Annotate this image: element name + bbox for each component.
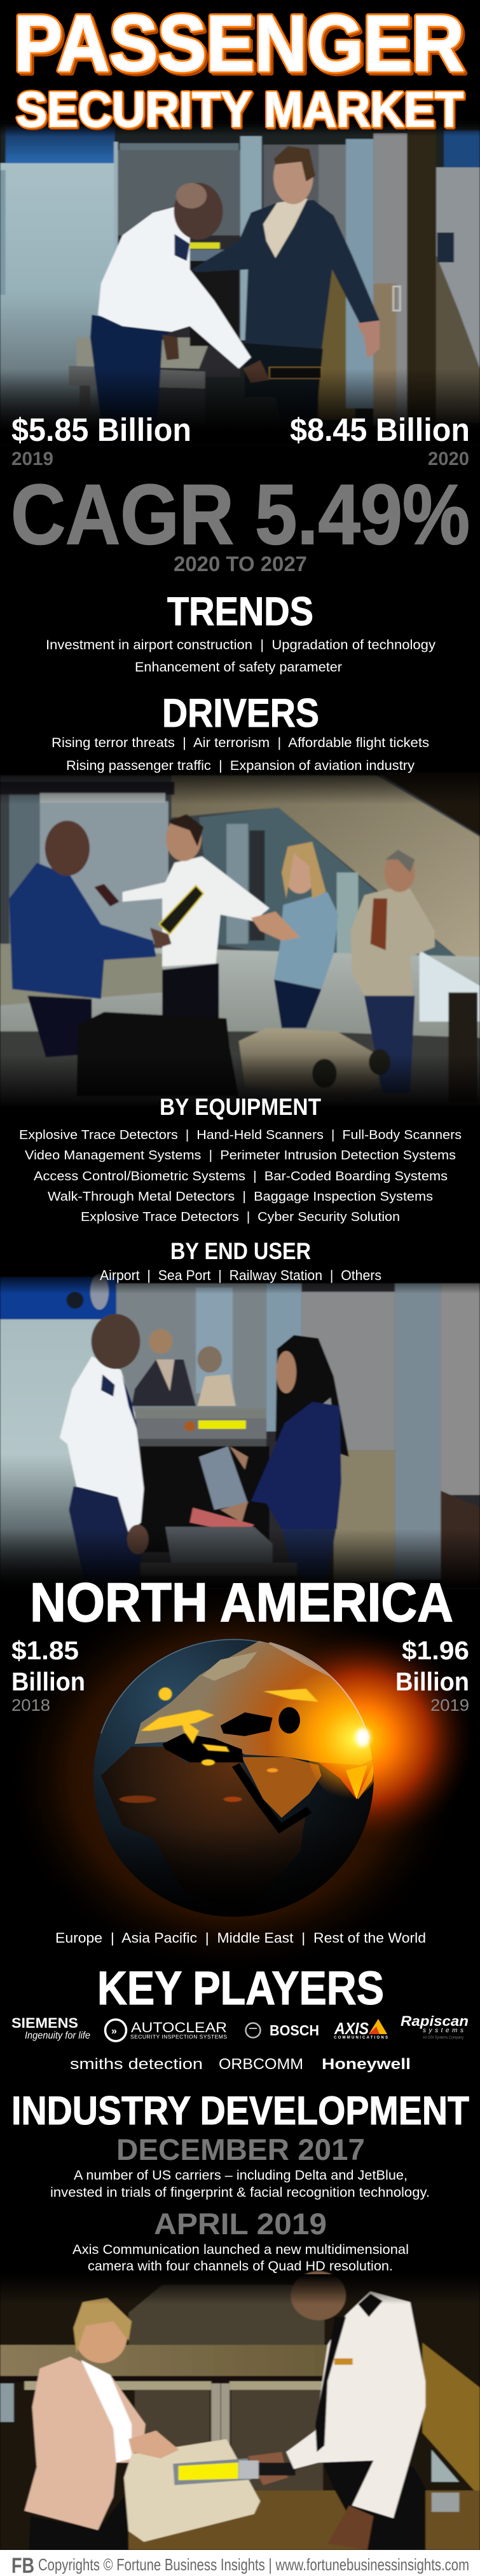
development: April 2019: camera with four channels of Quad HD resolution. bbox=[88, 2259, 393, 2274]
logo: Autoclear bbox=[106, 2020, 227, 2041]
by equipment section: Explosive Trace Detectors | Cyber Security Solution bbox=[81, 1210, 400, 1224]
development: April 2019: APRIL 2019 bbox=[154, 2207, 327, 2241]
stat: North America 2018: Billion bbox=[11, 1667, 85, 1696]
logo: Autoclear: SECURITY INSPECTION SYSTEMS bbox=[130, 2033, 227, 2040]
logo: Axis Communications: AXIS bbox=[334, 2019, 369, 2038]
stat: 2019 market value bbox=[11, 412, 191, 469]
globe illustration bbox=[33, 1605, 467, 1950]
trends section: Enhancement of safety parameter bbox=[135, 660, 342, 675]
logo: Siemens bbox=[11, 2015, 90, 2041]
by equipment section bbox=[19, 1094, 462, 1224]
stat: North America 2018: 2018 bbox=[11, 1696, 50, 1715]
logo: Siemens: Ingenuity for life bbox=[25, 2030, 90, 2041]
title: Passenger Security Market: SECURITY MARKET bbox=[17, 83, 465, 138]
title: Passenger Security Market: SECURITY MARKET bbox=[16, 81, 463, 137]
by equipment section: Walk-Through Metal Detectors | Baggage Inspection Systems bbox=[48, 1190, 433, 1204]
drivers section: Rising terror threats | Air terrorism | Affordable flight tickets bbox=[51, 736, 429, 750]
stat: North America 2019: $1.96 bbox=[402, 1636, 469, 1665]
by equipment section: Video Management Systems | Perimeter Intrusion Detection Systems bbox=[25, 1149, 456, 1163]
footer bar with copyright bbox=[0, 2550, 480, 2576]
logo: Bosch: BOSCH bbox=[270, 2022, 319, 2039]
by equipment section: Access Control/Biometric Systems | Bar-Coded Boarding Systems bbox=[34, 1170, 448, 1183]
photo: officer scanning handbag with wand bbox=[0, 2271, 480, 2550]
company logos bbox=[11, 2013, 469, 2073]
region heading: North America: NORTH AMERICA bbox=[30, 1572, 453, 1633]
photo: officer and passenger at baggage x-ray bbox=[0, 1271, 480, 1588]
stat: 2019 market value: 2019 bbox=[11, 448, 53, 469]
development: December 2017: invested in trials of fingerprint & facial recognition technology. bbox=[50, 2185, 430, 2200]
by equipment section: BY EQUIPMENT bbox=[160, 1094, 321, 1120]
logo: Axis Communications bbox=[334, 2019, 388, 2040]
logo: Rapiscan Systems: Rapiscan bbox=[401, 2013, 469, 2029]
trends section: TRENDS bbox=[167, 590, 313, 634]
industry development section bbox=[11, 2089, 469, 2274]
by end user section: BY END USER bbox=[170, 1238, 311, 1264]
development: December 2017: A number of US carriers – including Delta and JetBlue, bbox=[74, 2168, 408, 2183]
stat: North America 2018: $1.85 bbox=[11, 1636, 79, 1665]
trends section: Investment in airport construction | Upgradation of technology bbox=[46, 638, 436, 652]
trends section bbox=[46, 590, 436, 675]
by equipment section: Explosive Trace Detectors | Hand-Held Scanners | Full-Body Scanners bbox=[19, 1128, 462, 1142]
stat: North America 2018 bbox=[11, 1636, 85, 1715]
drivers section bbox=[51, 691, 429, 773]
logo: Orbcomm: ORBCOMM bbox=[219, 2056, 303, 2073]
stat: 2020 market value bbox=[290, 412, 470, 469]
stat: 2020 market value: $8.45 Billion bbox=[290, 412, 470, 448]
stat: 2019 market value: $5.85 Billion bbox=[11, 412, 191, 448]
photo: officer with hand scanner and passengers in queue bbox=[0, 762, 480, 1112]
logo: Autoclear: » bbox=[111, 2026, 117, 2037]
development: April 2019 bbox=[72, 2207, 409, 2274]
stat: North America 2019: Billion bbox=[395, 1667, 469, 1696]
logo: Bosch bbox=[245, 2022, 319, 2039]
drivers section: DRIVERS bbox=[162, 691, 319, 736]
logo: Honeywell: Honeywell bbox=[322, 2056, 411, 2073]
logo: Siemens: SIEMENS bbox=[11, 2015, 78, 2031]
logo: Rapiscan Systems: systems bbox=[423, 2027, 463, 2034]
logo: Rapiscan Systems: An OSI Systems Company bbox=[423, 2035, 464, 2040]
title: Passenger Security Market bbox=[14, 0, 467, 138]
photo: security officer scanning passenger at gate bbox=[0, 122, 480, 445]
logo: Axis Communications: COMMUNICATIONS bbox=[334, 2036, 388, 2040]
logo: Autoclear: AUTOCLEAR bbox=[131, 2020, 227, 2035]
title: Passenger Security Market: SECURITY MARKET bbox=[16, 81, 463, 137]
CAGR headline: 2020 TO 2027 bbox=[174, 552, 307, 576]
development: April 2019: Axis Communication launched a new multidimensional bbox=[72, 2242, 409, 2257]
stat: North America 2019: 2019 bbox=[430, 1696, 469, 1715]
end user list: Airport | Sea Port | Railway Station | Others bbox=[100, 1267, 381, 1283]
development: December 2017: DECEMBER 2017 bbox=[116, 2133, 365, 2166]
stat: 2020 market value: 2020 bbox=[428, 448, 469, 469]
drivers section: Rising passenger traffic | Expansion of aviation industry bbox=[66, 759, 415, 773]
logo: Rapiscan Systems bbox=[401, 2013, 469, 2040]
logo: Smiths Detection: smiths detection bbox=[70, 2056, 203, 2073]
key players heading: KEY PLAYERS bbox=[97, 1962, 384, 2014]
stat: North America 2019 bbox=[395, 1636, 469, 1715]
development: December 2017 bbox=[50, 2133, 430, 2200]
other regions list: Europe | Asia Pacific | Middle East | Rest of the World bbox=[55, 1930, 426, 1946]
